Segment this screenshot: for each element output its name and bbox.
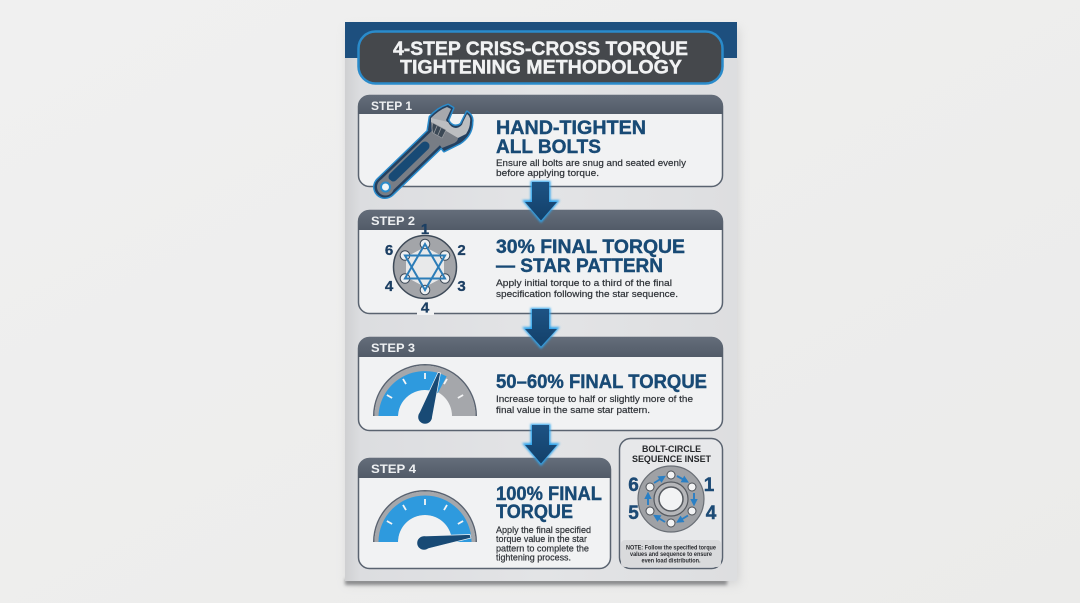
icon: wrench (377, 105, 472, 196)
step 4 heading (496, 484, 602, 523)
step 3 text (496, 393, 693, 415)
step 1 heading (496, 118, 646, 158)
step 4 text: tightening process. (496, 552, 571, 562)
bolt sequence numbers: 1 (421, 221, 429, 238)
step 3 label: STEP 3 (371, 343, 415, 355)
title text: TIGHTENING METHODOLOGY (400, 58, 682, 78)
inset numbers: 4 (706, 503, 717, 524)
panel: bolt-circle sequence inset (620, 438, 722, 568)
panel: step 1 (358, 95, 723, 196)
bolt sequence numbers: 6 (385, 242, 393, 259)
bolt sequence numbers: 4 (421, 300, 430, 316)
icon: star pattern bolt circle (385, 221, 466, 316)
inset note (621, 540, 721, 567)
step 1 label: STEP 1 (371, 101, 413, 113)
header band (345, 22, 737, 58)
inset title (632, 443, 711, 464)
step 2 text: Apply initial torque to a third of the final (496, 277, 672, 288)
step 3 heading: 50–60% FINAL TORQUE (496, 372, 707, 393)
arrow: step 3 to step 4 (522, 424, 560, 466)
arrow: step 2 to step 3 (522, 308, 560, 349)
step 1 heading: HAND-TIGHTEN (496, 118, 646, 139)
step 4 heading: 100% FINAL (496, 484, 602, 505)
inset numbers (628, 475, 717, 524)
title text (393, 39, 688, 78)
bolt sequence numbers: 4 (385, 278, 394, 295)
step 4 text (496, 524, 591, 562)
step 1 text: Ensure all bolts are snug and seated evenly (496, 157, 686, 168)
step 2 heading: 30% FINAL TORQUE (496, 237, 685, 258)
poster panel (345, 22, 737, 581)
panel: step 4 (358, 458, 611, 568)
inset numbers: 5 (628, 503, 639, 524)
step 1 text: before applying torque. (496, 167, 599, 178)
inset title: SEQUENCE INSET (632, 453, 711, 464)
inset note: values and sequence to ensure (630, 552, 713, 558)
inset numbers: 6 (628, 475, 639, 496)
arrow: step 1 to step 2 (522, 181, 560, 223)
step 4 heading: TORQUE (496, 502, 573, 523)
bolt sequence numbers (385, 221, 466, 316)
step 4 label: STEP 4 (371, 464, 417, 476)
inset numbers: 1 (704, 475, 715, 496)
step 2 text (496, 277, 678, 299)
step 2 heading: — STAR PATTERN (496, 256, 663, 277)
step 4 text: pattern to complete the (496, 542, 589, 554)
step 4 text: torque value in the star (496, 533, 587, 544)
icon: gauge 50-60% (373, 364, 477, 424)
step 2 text: specification following the star sequence. (496, 288, 678, 299)
step 1 heading: ALL BOLTS (496, 137, 601, 158)
title text: 4-STEP CRISS-CROSS TORQUE (393, 39, 688, 60)
panel: step 3 (358, 337, 723, 430)
step 2 label: STEP 2 (371, 216, 415, 228)
poster shadow (345, 28, 739, 585)
step 3 text: final value in the same star pattern. (496, 404, 650, 415)
title pill (358, 32, 722, 84)
icon: gauge 100% (373, 490, 477, 550)
step 2 heading (496, 237, 685, 277)
icon: bolt-circle flange with arrows (628, 466, 717, 532)
bolt sequence numbers: 3 (457, 278, 466, 295)
panel: step 2 (358, 210, 723, 316)
step 4 text: Apply the final specified (496, 524, 591, 535)
inset title: BOLT-CIRCLE (642, 443, 701, 454)
bolt sequence numbers: 2 (457, 242, 466, 259)
step 3 text: Increase torque to half or slightly more of the (496, 393, 693, 404)
inset note: even load distribution. (642, 558, 701, 564)
step 1 text (496, 157, 686, 178)
inset note: NOTE: Follow the specified torque (626, 546, 717, 552)
